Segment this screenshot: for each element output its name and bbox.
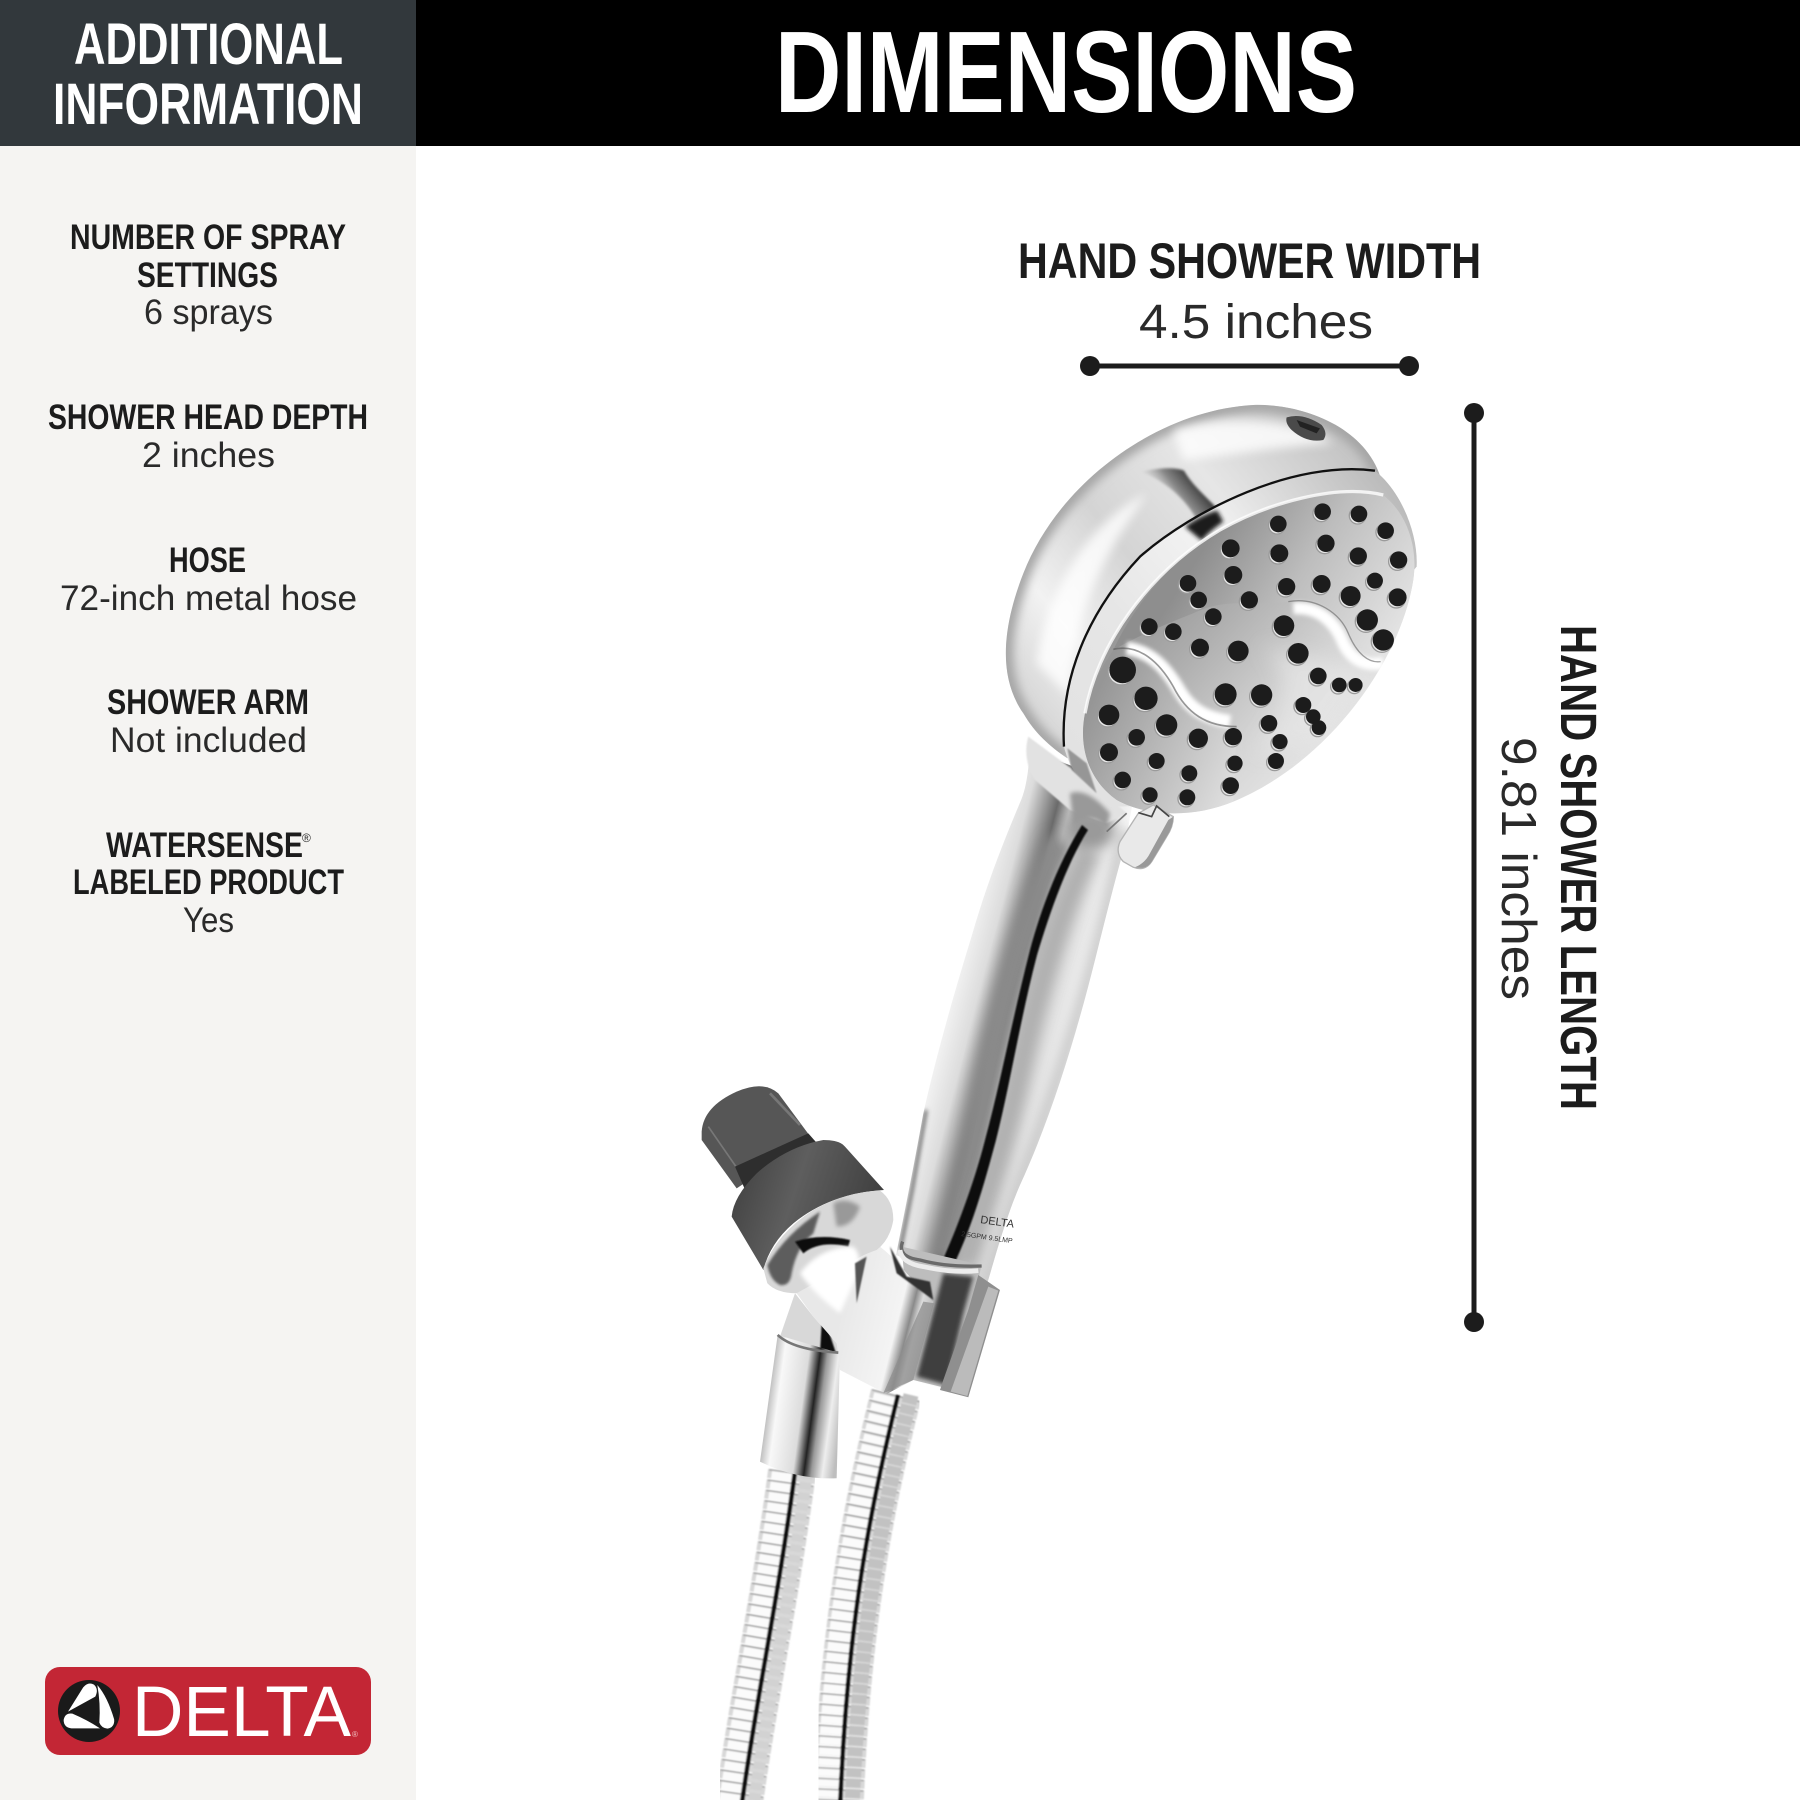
spec: number of spray settings: SETTINGS [137, 256, 278, 295]
spec: hose: 72-inch metal hose [60, 579, 357, 618]
spec: number of spray settings: 6 sprays [144, 293, 273, 332]
header: dimensions title [416, 0, 1800, 146]
header: additional information [0, 0, 416, 146]
handle engraved text [961, 1214, 1015, 1245]
face middle light [1276, 652, 1336, 731]
spec: watersense labeled product: Yes [183, 901, 234, 940]
head back dome [1006, 405, 1381, 758]
spec: shower head depth: SHOWER HEAD DEPTH [48, 398, 368, 437]
arrow: length dimension line [1464, 403, 1484, 1332]
header: additional information: ADDITIONAL [74, 12, 343, 77]
spec: shower head depth: 2 inches [142, 436, 275, 475]
dome edge shading [1006, 405, 1381, 758]
bracket: arm tube and collar [760, 1293, 840, 1478]
spec: watersense labeled product [73, 826, 344, 940]
head neck [1026, 737, 1127, 823]
handle dark reflection [938, 825, 1088, 1276]
spray lever [1118, 805, 1173, 869]
lower handle section [902, 1247, 982, 1388]
face wave highlight [1127, 648, 1230, 722]
spec: watersense labeled product: ® [302, 831, 311, 845]
spec: watersense labeled product: LABELED PRODUCT [73, 863, 344, 902]
spec: number of spray settings [70, 218, 346, 332]
head face [1083, 492, 1414, 813]
logo: Delta: DELTA [132, 1673, 352, 1752]
header: additional information: INFORMATION [53, 72, 363, 137]
spec: number of spray settings: NUMBER OF SPRAY [70, 218, 346, 257]
knob neck [735, 1133, 820, 1193]
dome dark reflection [1146, 466, 1216, 517]
valve on head top [1286, 416, 1325, 441]
handle engraved text: 2.5GPM 9.5LMP [961, 1231, 1013, 1245]
dimension label: hand shower width: HAND SHOWER WIDTH [1018, 233, 1481, 289]
dimension label: hand shower length [1491, 625, 1607, 1110]
bracket: shower clip and knob [702, 1086, 1000, 1397]
product illustration: hand shower with bracket and hoses [702, 405, 1417, 1800]
head rim [1064, 469, 1417, 807]
spec: hose: HOSE [169, 541, 246, 580]
logo: Delta [45, 1667, 371, 1755]
spec: hose [60, 541, 357, 618]
swivel ball [763, 1191, 893, 1293]
hose: left [728, 1472, 807, 1800]
handle [896, 750, 1135, 1290]
handle collar ring [901, 1242, 982, 1266]
back clip finger [940, 1275, 1000, 1397]
knob nut [732, 1140, 884, 1270]
spec: shower arm: Not included [110, 721, 307, 760]
spray holes [1097, 505, 1406, 807]
handle engraved text: DELTA [980, 1214, 1015, 1231]
face edge [1085, 492, 1383, 713]
knob cap [702, 1086, 812, 1188]
face lower zone [1083, 677, 1192, 814]
dimension label: hand shower width: 4.5 inches [1139, 296, 1373, 349]
rim dark line [1064, 469, 1375, 747]
arm collar ring [778, 1335, 838, 1353]
clip shadow stripe [883, 1302, 934, 1393]
header: dimensions title: DIMENSIONS [775, 7, 1357, 137]
rim dark reflection [1185, 511, 1223, 541]
spec: shower head depth [48, 398, 368, 475]
logo: Delta: ® [352, 1730, 358, 1739]
spec: shower arm [107, 683, 309, 760]
arrow: width dimension line [1080, 356, 1419, 376]
spec: watersense labeled product: WATERSENSE [106, 826, 303, 865]
dimension label: hand shower length: 9.81 inches [1491, 737, 1545, 1000]
shower head [1006, 405, 1417, 869]
spec: shower arm: SHOWER ARM [107, 683, 309, 722]
hose: right [827, 1395, 911, 1800]
face upper zone [1114, 493, 1404, 648]
dimension label: hand shower length: HAND SHOWER LENGTH [1550, 625, 1607, 1110]
handle top shadow [1066, 810, 1114, 850]
dome highlights [1037, 493, 1147, 697]
handle shading [900, 830, 1125, 1290]
dimension label: hand shower width [1018, 233, 1481, 349]
panel: additional information sidebar [0, 146, 416, 1800]
clip body [797, 1247, 933, 1394]
